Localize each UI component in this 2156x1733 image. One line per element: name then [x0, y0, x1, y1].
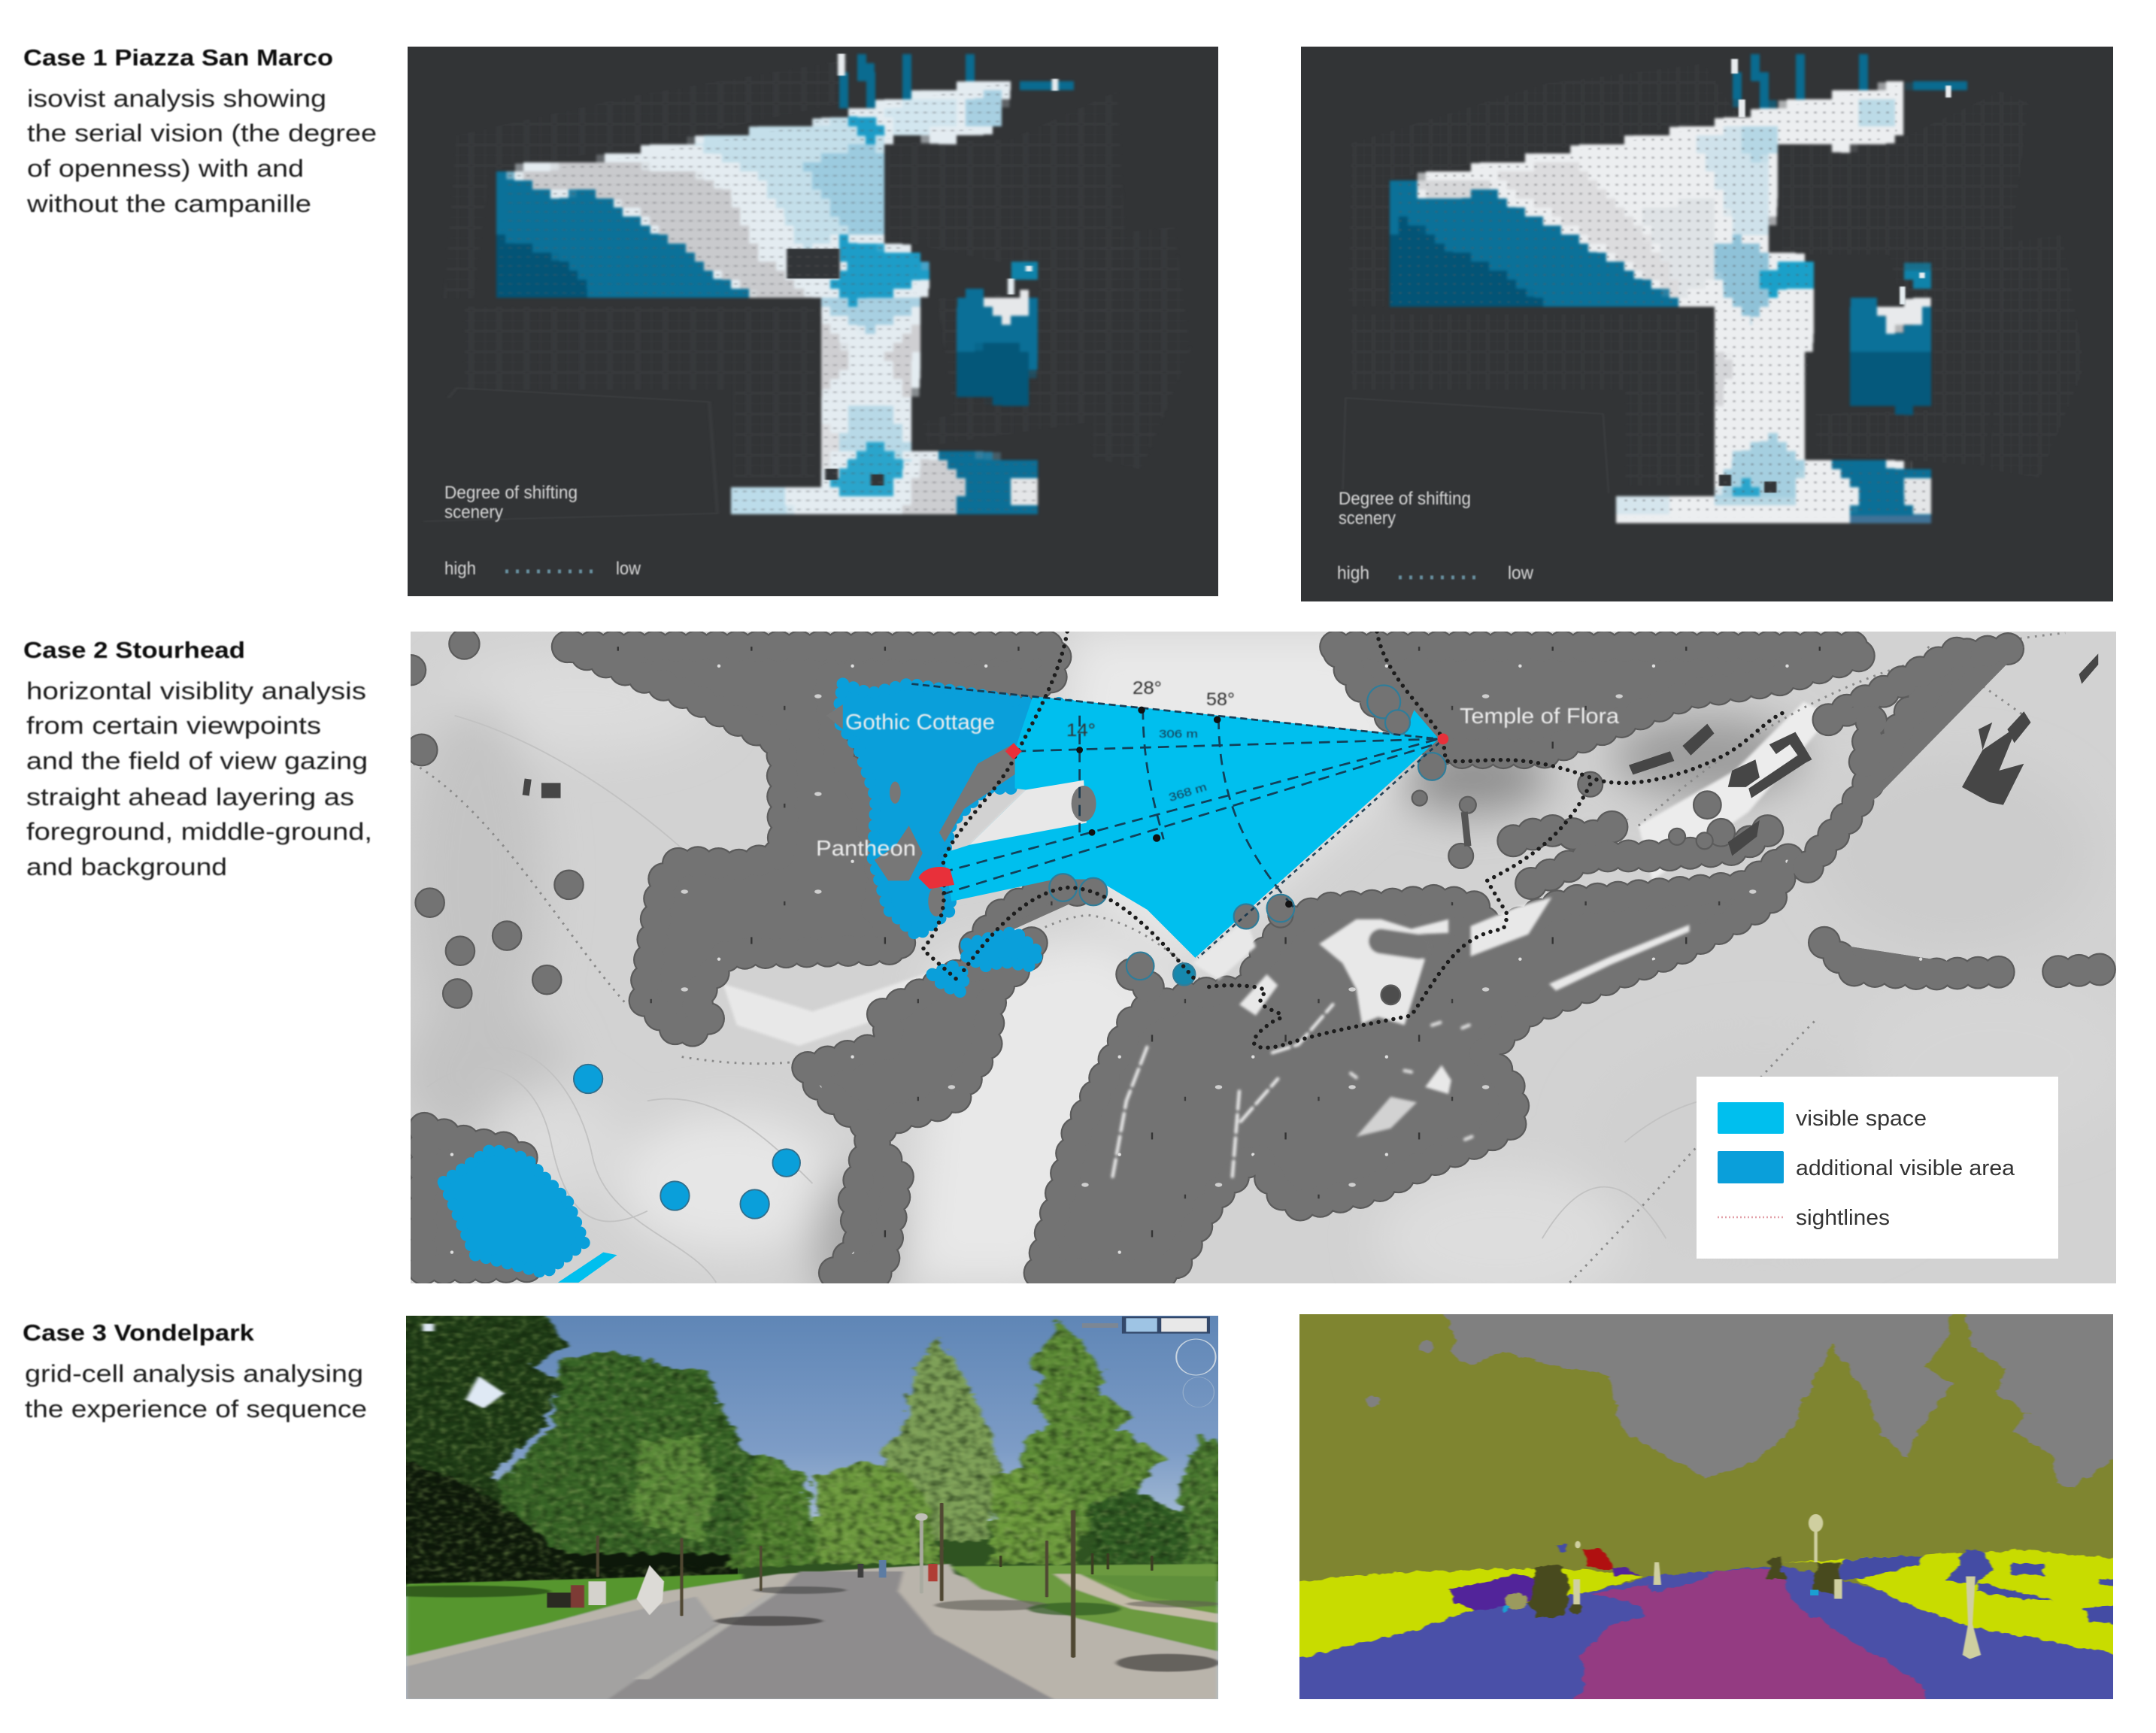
text block: case 3: grid-cell analysis analysing: [25, 1360, 363, 1387]
sky patches between the branches: [423, 1324, 505, 1408]
side pool: [954, 290, 1039, 404]
legend: high to low: high: [444, 559, 476, 579]
road segment: [1569, 1568, 1928, 1705]
sightline markers: [1076, 707, 1293, 907]
text block: case 2: and background: [26, 853, 227, 880]
clearings inside the woodland: [969, 780, 1690, 1177]
place labels: Temple of Flora: [1460, 704, 1620, 729]
viewpoint sightlines: [911, 684, 1439, 958]
grey tree gaps within blue: [826, 704, 1016, 916]
isolated trees: [396, 629, 1735, 1008]
blue patches: [1557, 1546, 2124, 1627]
isovist details: [1390, 59, 1951, 517]
visible space cone: [943, 696, 1439, 958]
isovist surface: [1387, 59, 1964, 520]
angle and distance annotations: 306 m: [1159, 728, 1198, 741]
text block: case 3: the experience of sequence: [25, 1395, 367, 1422]
piers: [1737, 59, 1964, 108]
panel: Stourhead visibility map: [396, 629, 2134, 1307]
panel: Vondelpark street photo: [365, 1310, 1224, 1699]
angle and distance annotations: 368 m: [1167, 780, 1208, 804]
text block: case 2: and the field of view gazing: [26, 747, 368, 774]
place labels: Pantheon: [816, 837, 916, 861]
ground: grass, gravel, road: [365, 1564, 1219, 1699]
contour lines: [427, 716, 1845, 1283]
heading: case 2: Case 2 Stourhead: [23, 637, 245, 663]
label: degree of shifting scenery: [444, 483, 578, 523]
foliage: [396, 1310, 1224, 1586]
legend: additional visible area: [1718, 1151, 2015, 1183]
legend: additional visible area: additional visible area: [1796, 1156, 2015, 1180]
text block: case 1: [23, 44, 377, 217]
label: degree of shifting scenery: scenery: [444, 502, 503, 523]
grass segment right: [1785, 1550, 2124, 1655]
label: degree of shifting scenery: Degree of shifting: [1339, 489, 1471, 509]
angle and distance annotations: [1066, 678, 1235, 804]
heading: case 3: Case 3 Vondelpark: [23, 1319, 255, 1346]
foliage backing at tree line: [406, 1521, 1218, 1581]
label: degree of shifting scenery: Degree of shifting: [444, 483, 578, 503]
angle and distance annotations: 28°: [1133, 678, 1162, 698]
additional visible area: [444, 684, 1081, 1273]
legend: high to low: low: [1508, 563, 1534, 583]
legend: sightlines: sightlines: [1796, 1206, 1890, 1230]
small cyan segment: [1810, 1590, 1818, 1595]
legend box: [1697, 1077, 2058, 1259]
buildings: [523, 653, 2098, 856]
faint footpaths: [414, 633, 2065, 1283]
piers: [841, 53, 1069, 105]
text block: case 1: the serial vision (the degree: [27, 120, 377, 147]
street view controls: [1082, 1316, 1216, 1407]
trees over cone edge: [1049, 685, 1446, 985]
main plaza base: [1387, 83, 1933, 520]
dotted walking route: [923, 632, 1783, 1047]
isovist details: [497, 53, 1058, 511]
panel: isovist map with campanile: [408, 47, 1218, 596]
trunks, lamp, people: [547, 1504, 1152, 1656]
text block: case 1: of openness) with and: [27, 155, 304, 182]
text block: case 1: isovist analysis showing: [27, 85, 326, 112]
red segment: [1584, 1548, 1612, 1569]
dark trunk segments: [1530, 1557, 1841, 1619]
tree canopy masses: [414, 647, 2113, 1273]
legend: visible space: visible space: [1796, 1107, 1927, 1131]
tree shadows on ground: [714, 1616, 823, 1626]
pavement segment: [1290, 1565, 2124, 1705]
panel: isovist map without campanile: [1301, 47, 2113, 601]
place labels: Gothic Cottage: [845, 710, 995, 735]
purple bench segment: [1449, 1567, 1638, 1611]
grass segment left: [1290, 1568, 1642, 1661]
side pool: [1846, 296, 1933, 412]
panel: Vondelpark grid-cell segmentation: [1290, 1310, 2124, 1705]
text block: case 2: [23, 637, 372, 880]
terrain shading: [399, 632, 2134, 1307]
legend: high to low: [1337, 563, 1534, 583]
cream lamp and pole segments: [1573, 1514, 1981, 1659]
legend: visible space: [1718, 1102, 1927, 1134]
text block: case 2: horizontal visiblity analysis: [26, 677, 366, 704]
text block: case 1: without the campanille: [26, 190, 311, 217]
scattered visible trees: [574, 1065, 800, 1219]
heading: case 1: Case 1 Piazza San Marco: [23, 44, 333, 71]
legend: high to low: [444, 559, 641, 579]
isovist surface: [493, 53, 1069, 514]
angle and distance annotations: 58°: [1206, 689, 1235, 710]
label: degree of shifting scenery: scenery: [1339, 508, 1396, 529]
text block: case 3: [23, 1319, 367, 1422]
angle and distance annotations: 14°: [1066, 720, 1096, 741]
label: degree of shifting scenery: [1339, 489, 1471, 529]
text block: case 2: from certain viewpoints: [26, 712, 321, 739]
place labels: [816, 704, 1620, 861]
text block: case 2: foreground, middle-ground,: [26, 818, 372, 845]
text block: case 2: straight ahead layering as: [26, 783, 354, 810]
legend: high to low: high: [1337, 563, 1369, 583]
main plaza base: [493, 79, 1039, 514]
red viewpoints: [918, 733, 1448, 889]
sky segment: [1366, 1310, 2124, 1486]
legend: high to low: low: [616, 559, 641, 579]
